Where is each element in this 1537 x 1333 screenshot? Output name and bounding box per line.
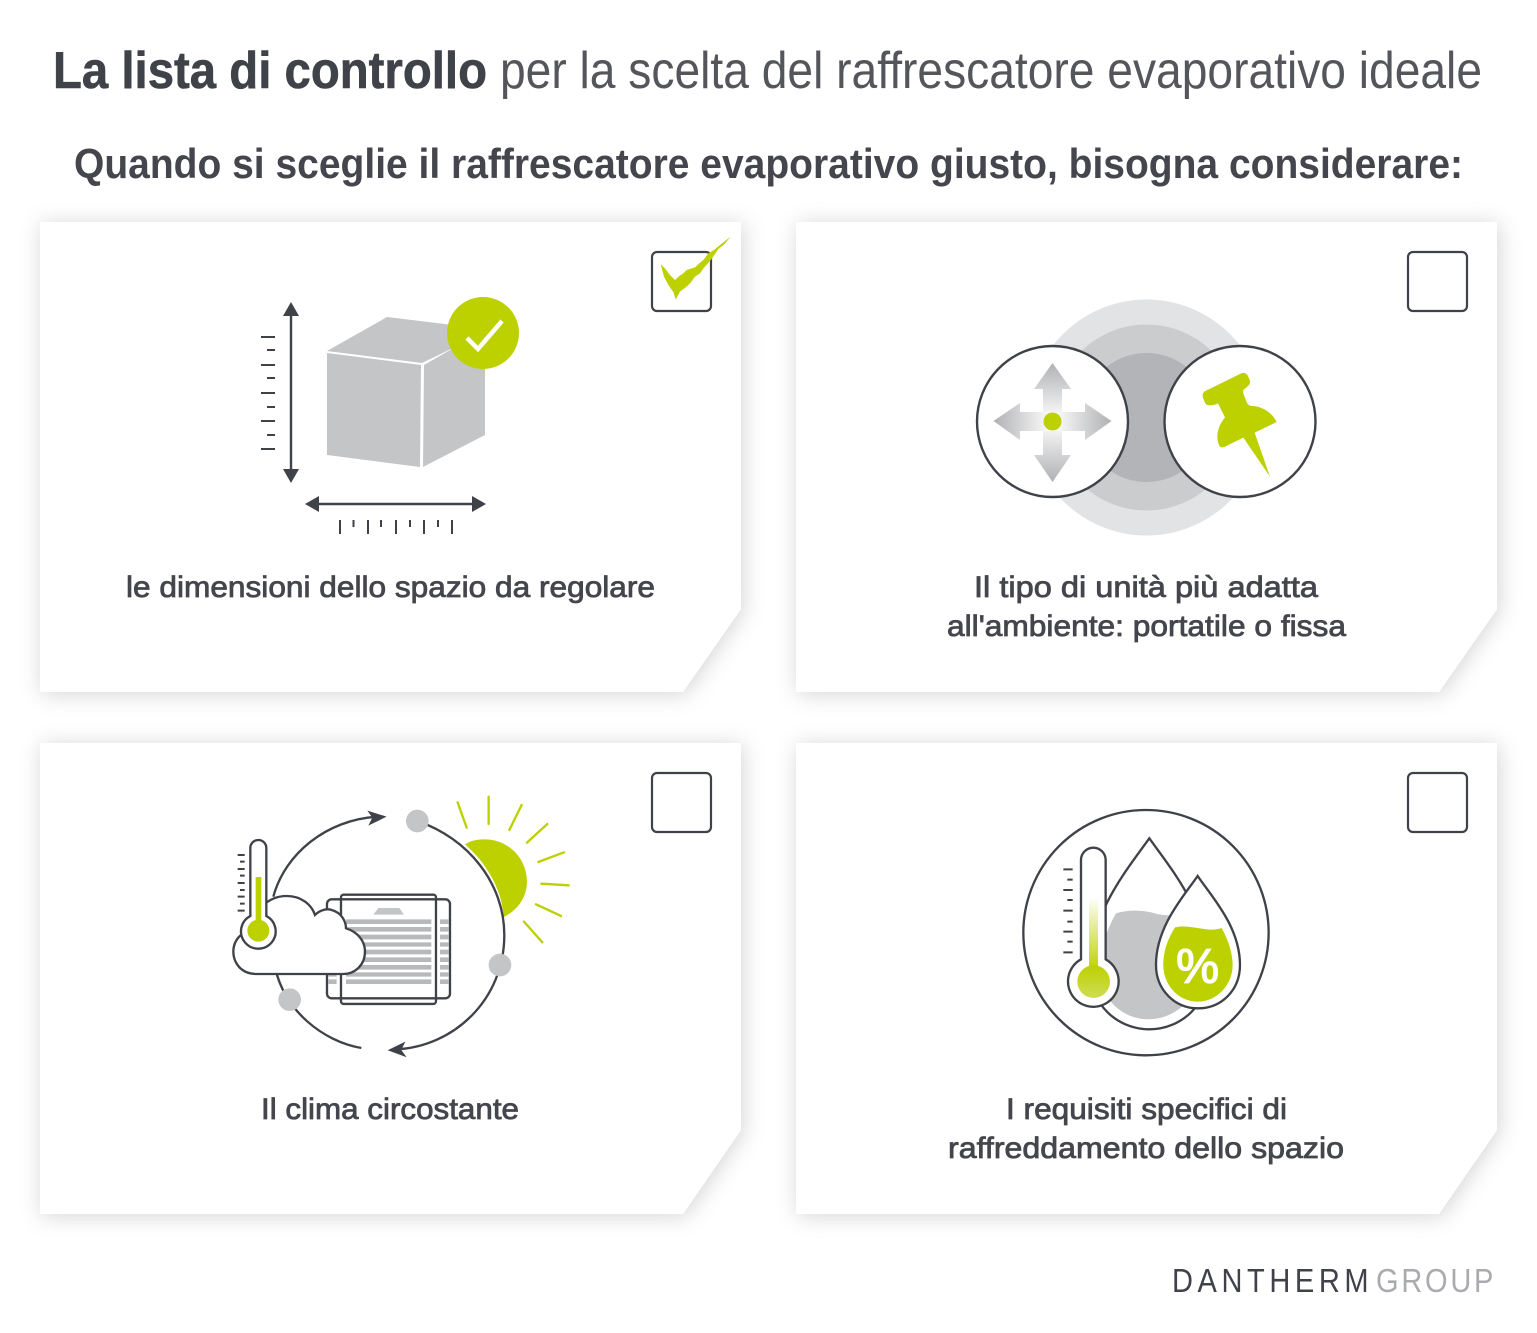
thermometer bbox=[238, 840, 276, 949]
card background bbox=[796, 222, 1497, 692]
cloud bbox=[233, 896, 365, 974]
logo bbox=[1172, 1262, 1496, 1299]
fixed circle with pin bbox=[1164, 346, 1316, 497]
title: La lista di controllo bbox=[53, 42, 487, 100]
title bbox=[53, 42, 1482, 100]
card background bbox=[40, 222, 741, 692]
portable circle with arrows bbox=[977, 346, 1128, 497]
vertical arrow and ruler bbox=[261, 302, 299, 483]
ring dots bbox=[278, 810, 511, 1011]
icon: temperature and humidity bbox=[1023, 810, 1269, 1055]
logo: DANTHERM bbox=[1172, 1262, 1373, 1299]
label: raffreddamento dello spazio bbox=[948, 1132, 1344, 1165]
label: Il tipo di unità più adatta bbox=[974, 571, 1318, 604]
large water drop bbox=[1090, 838, 1209, 1029]
icon: climate cycle bbox=[233, 797, 569, 1057]
label bbox=[947, 571, 1346, 643]
checkbox bbox=[1408, 252, 1467, 311]
panel: unit type bbox=[796, 222, 1497, 692]
card background bbox=[796, 743, 1497, 1214]
sun bbox=[458, 797, 569, 942]
panel: cooling requirements bbox=[796, 743, 1497, 1214]
icon: portable or fixed bbox=[977, 300, 1316, 536]
humidity drop with percent: % bbox=[1176, 940, 1219, 994]
panel: climate bbox=[40, 743, 741, 1214]
concentric circles bbox=[1028, 300, 1264, 536]
card background bbox=[40, 743, 741, 1214]
panel: room dimensions bbox=[40, 222, 741, 692]
logo: GROUP bbox=[1376, 1262, 1496, 1299]
subtitle: Quando si sceglie il raffrescatore evaporativo giusto, bisogna considerare: bbox=[74, 140, 1463, 187]
label: all'ambiente: portatile o fissa bbox=[947, 610, 1346, 643]
horizontal arrow and ruler bbox=[305, 496, 486, 534]
thermometer bbox=[1063, 848, 1119, 1007]
label: le dimensioni dello spazio da regolare bbox=[126, 571, 655, 604]
label bbox=[948, 1093, 1344, 1165]
checkbox bbox=[652, 773, 711, 832]
cycle ring bbox=[273, 811, 504, 1057]
icon: cube with dimensions bbox=[261, 297, 519, 534]
cube bbox=[327, 317, 485, 467]
label: I requisiti specifici di bbox=[1006, 1093, 1287, 1126]
outer circle bbox=[1023, 810, 1269, 1055]
checkbox ticked bbox=[652, 237, 731, 311]
label: Il clima circostante bbox=[261, 1093, 519, 1126]
green check badge bbox=[447, 297, 519, 369]
humidity drop with percent bbox=[1156, 876, 1240, 1008]
checkbox bbox=[1408, 773, 1467, 832]
cooler unit bbox=[327, 895, 450, 1004]
